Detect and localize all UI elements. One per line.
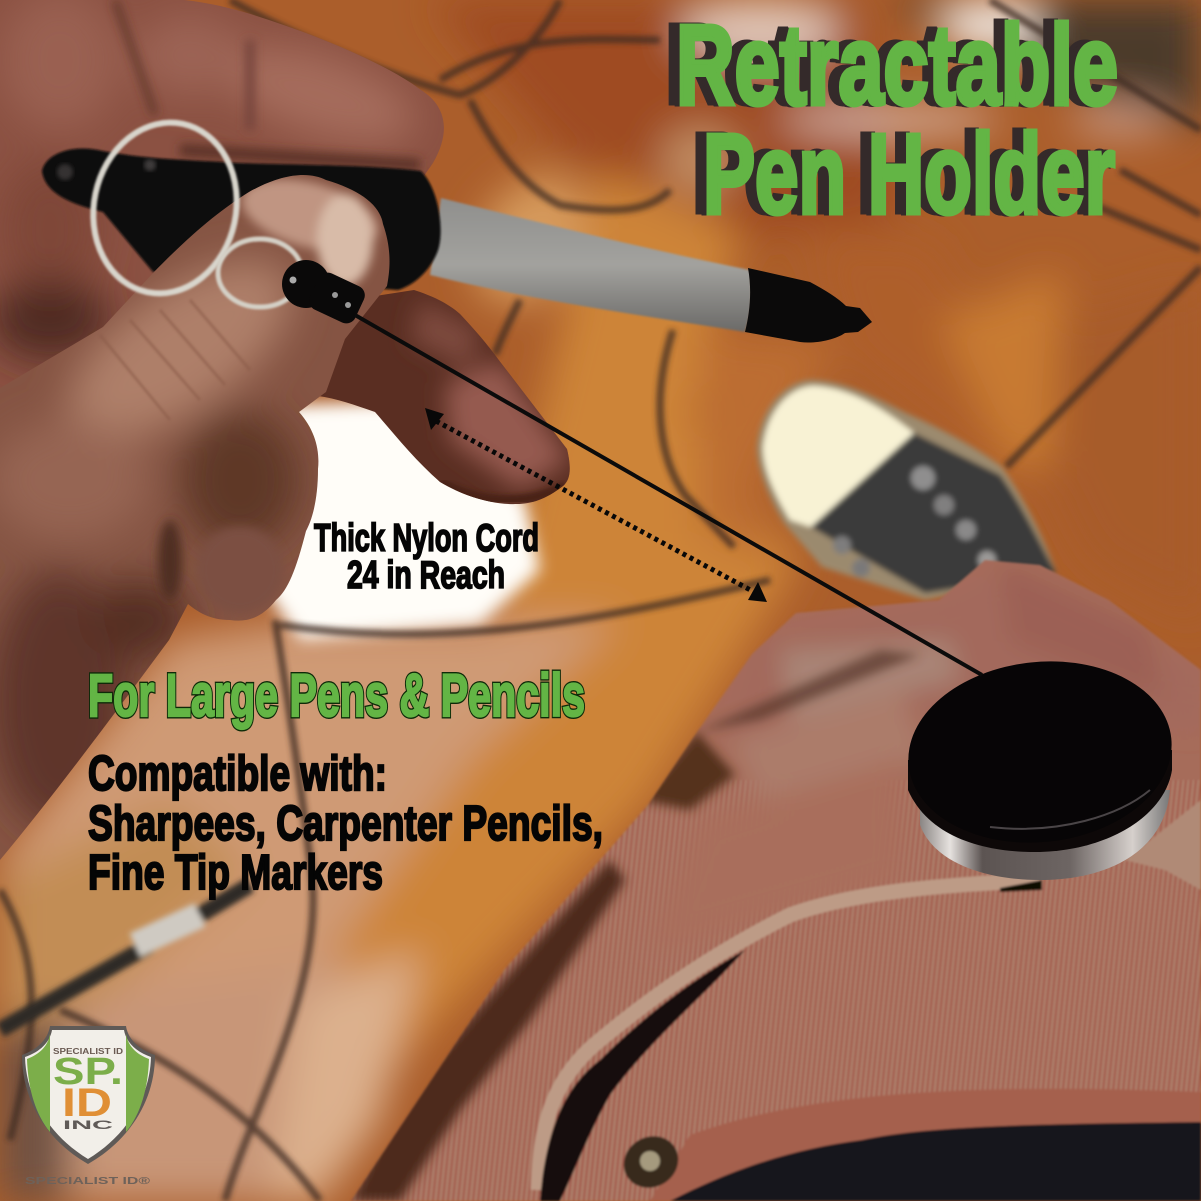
foam grip: [42, 148, 441, 290]
compatibility list: [88, 747, 603, 900]
thumb and lower hand: [0, 166, 400, 870]
compatibility list: Fine Tip Markers: [88, 846, 383, 900]
logo: specialist id shield: [22, 1026, 155, 1164]
collar flap right: [1125, 800, 1201, 890]
logo: specialist id shield: ID: [62, 1081, 112, 1125]
pen cap: [745, 268, 872, 343]
shoe: [757, 380, 1056, 600]
upper blurred fold: [675, 575, 1156, 930]
compatibility list: Sharpees, Carpenter Pencils,: [88, 797, 603, 851]
middle finger: [320, 290, 570, 504]
logo: specialist id shield: SPECIALIST ID: [53, 1047, 123, 1056]
arrow: reach dotted double arrow: [425, 408, 767, 602]
retractable cord: [355, 315, 982, 675]
upper finger and palm: [0, 0, 444, 388]
pants: [340, 550, 1201, 1201]
blurred cable clip: [0, 885, 250, 1030]
pocket flap edge: [538, 880, 1040, 1190]
key rings and cord connector: [78, 109, 368, 327]
heading: for large pens and pencils: [88, 662, 585, 729]
pocket opening: [540, 950, 745, 1201]
heading: for large pens and pencils: For Large Pens & Pencils: [88, 662, 585, 729]
logo: specialist id shield: SP.: [53, 1051, 123, 1093]
waistband: [650, 1089, 1201, 1201]
shadow on pants edge: [351, 650, 920, 1201]
heading: for large pens and pencils: For Large Pens & Pencils: [88, 662, 585, 729]
marker pen: [42, 148, 872, 343]
rivet: [622, 1135, 680, 1189]
window glare: [265, 400, 540, 640]
title: [665, 1, 1118, 237]
logo caption: SPECIALIST ID®: [25, 1176, 151, 1187]
cord caption: [314, 517, 539, 597]
logo: specialist id shield: INC: [63, 1118, 114, 1132]
cord caption: Thick Nylon Cord: [314, 517, 539, 560]
cord caption: 24 in Reach: [347, 554, 505, 597]
compatibility list: Compatible with:: [88, 747, 387, 801]
retractable reel disc: [899, 649, 1181, 880]
pen barrel: [430, 198, 752, 332]
